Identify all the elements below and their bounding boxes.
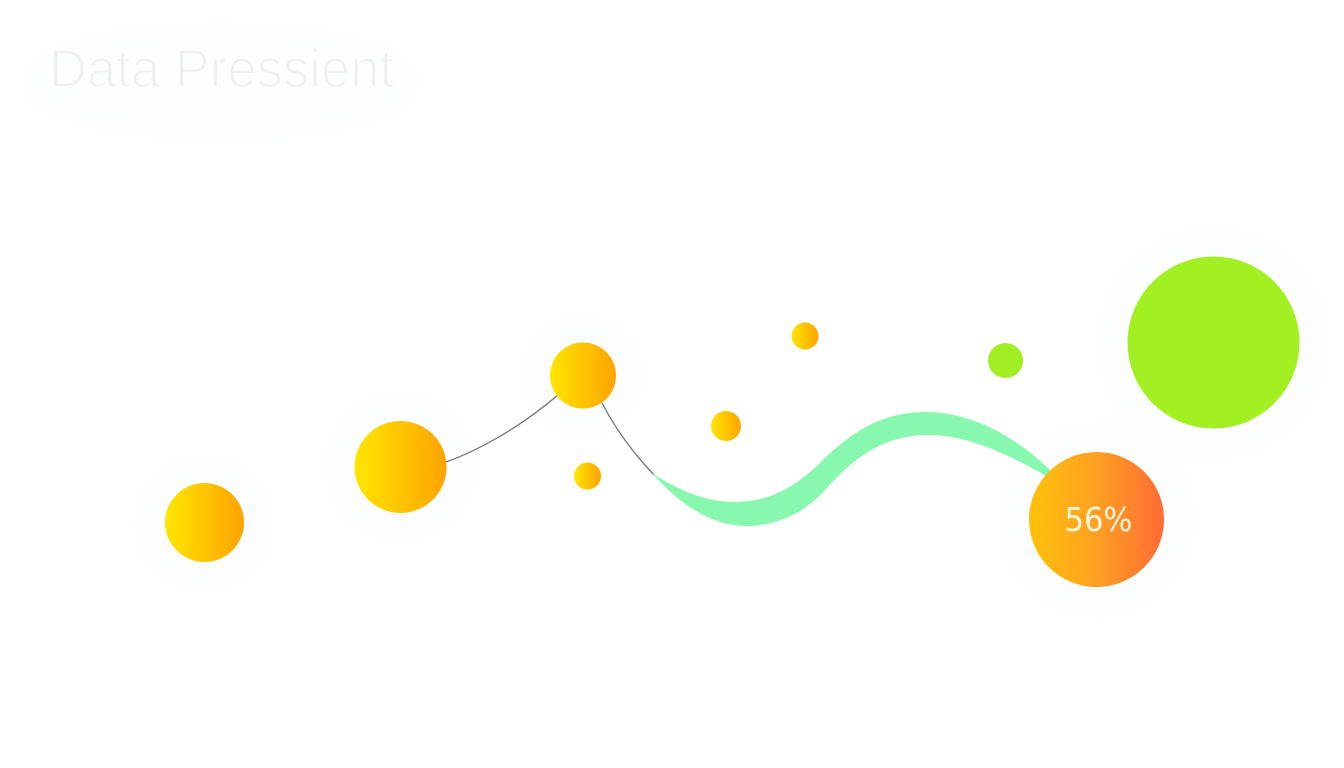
dot: yellow lower — [574, 462, 601, 490]
title: Data Pressient — [49, 39, 394, 99]
dot: green small — [988, 343, 1023, 378]
circle: small yellow left — [165, 483, 244, 562]
dot: yellow centre — [711, 411, 741, 441]
circle: medium yellow — [354, 421, 446, 513]
percentage value: 56% — [1064, 500, 1132, 539]
circle: top yellow node — [550, 342, 616, 408]
connector: large circle to top circle — [446, 395, 558, 462]
circle: large green — [1128, 256, 1300, 428]
dot: yellow upper — [792, 322, 818, 350]
green ribbon — [652, 412, 1052, 526]
percentage circle — [1029, 452, 1164, 587]
connector: top circle to ribbon — [602, 403, 654, 475]
